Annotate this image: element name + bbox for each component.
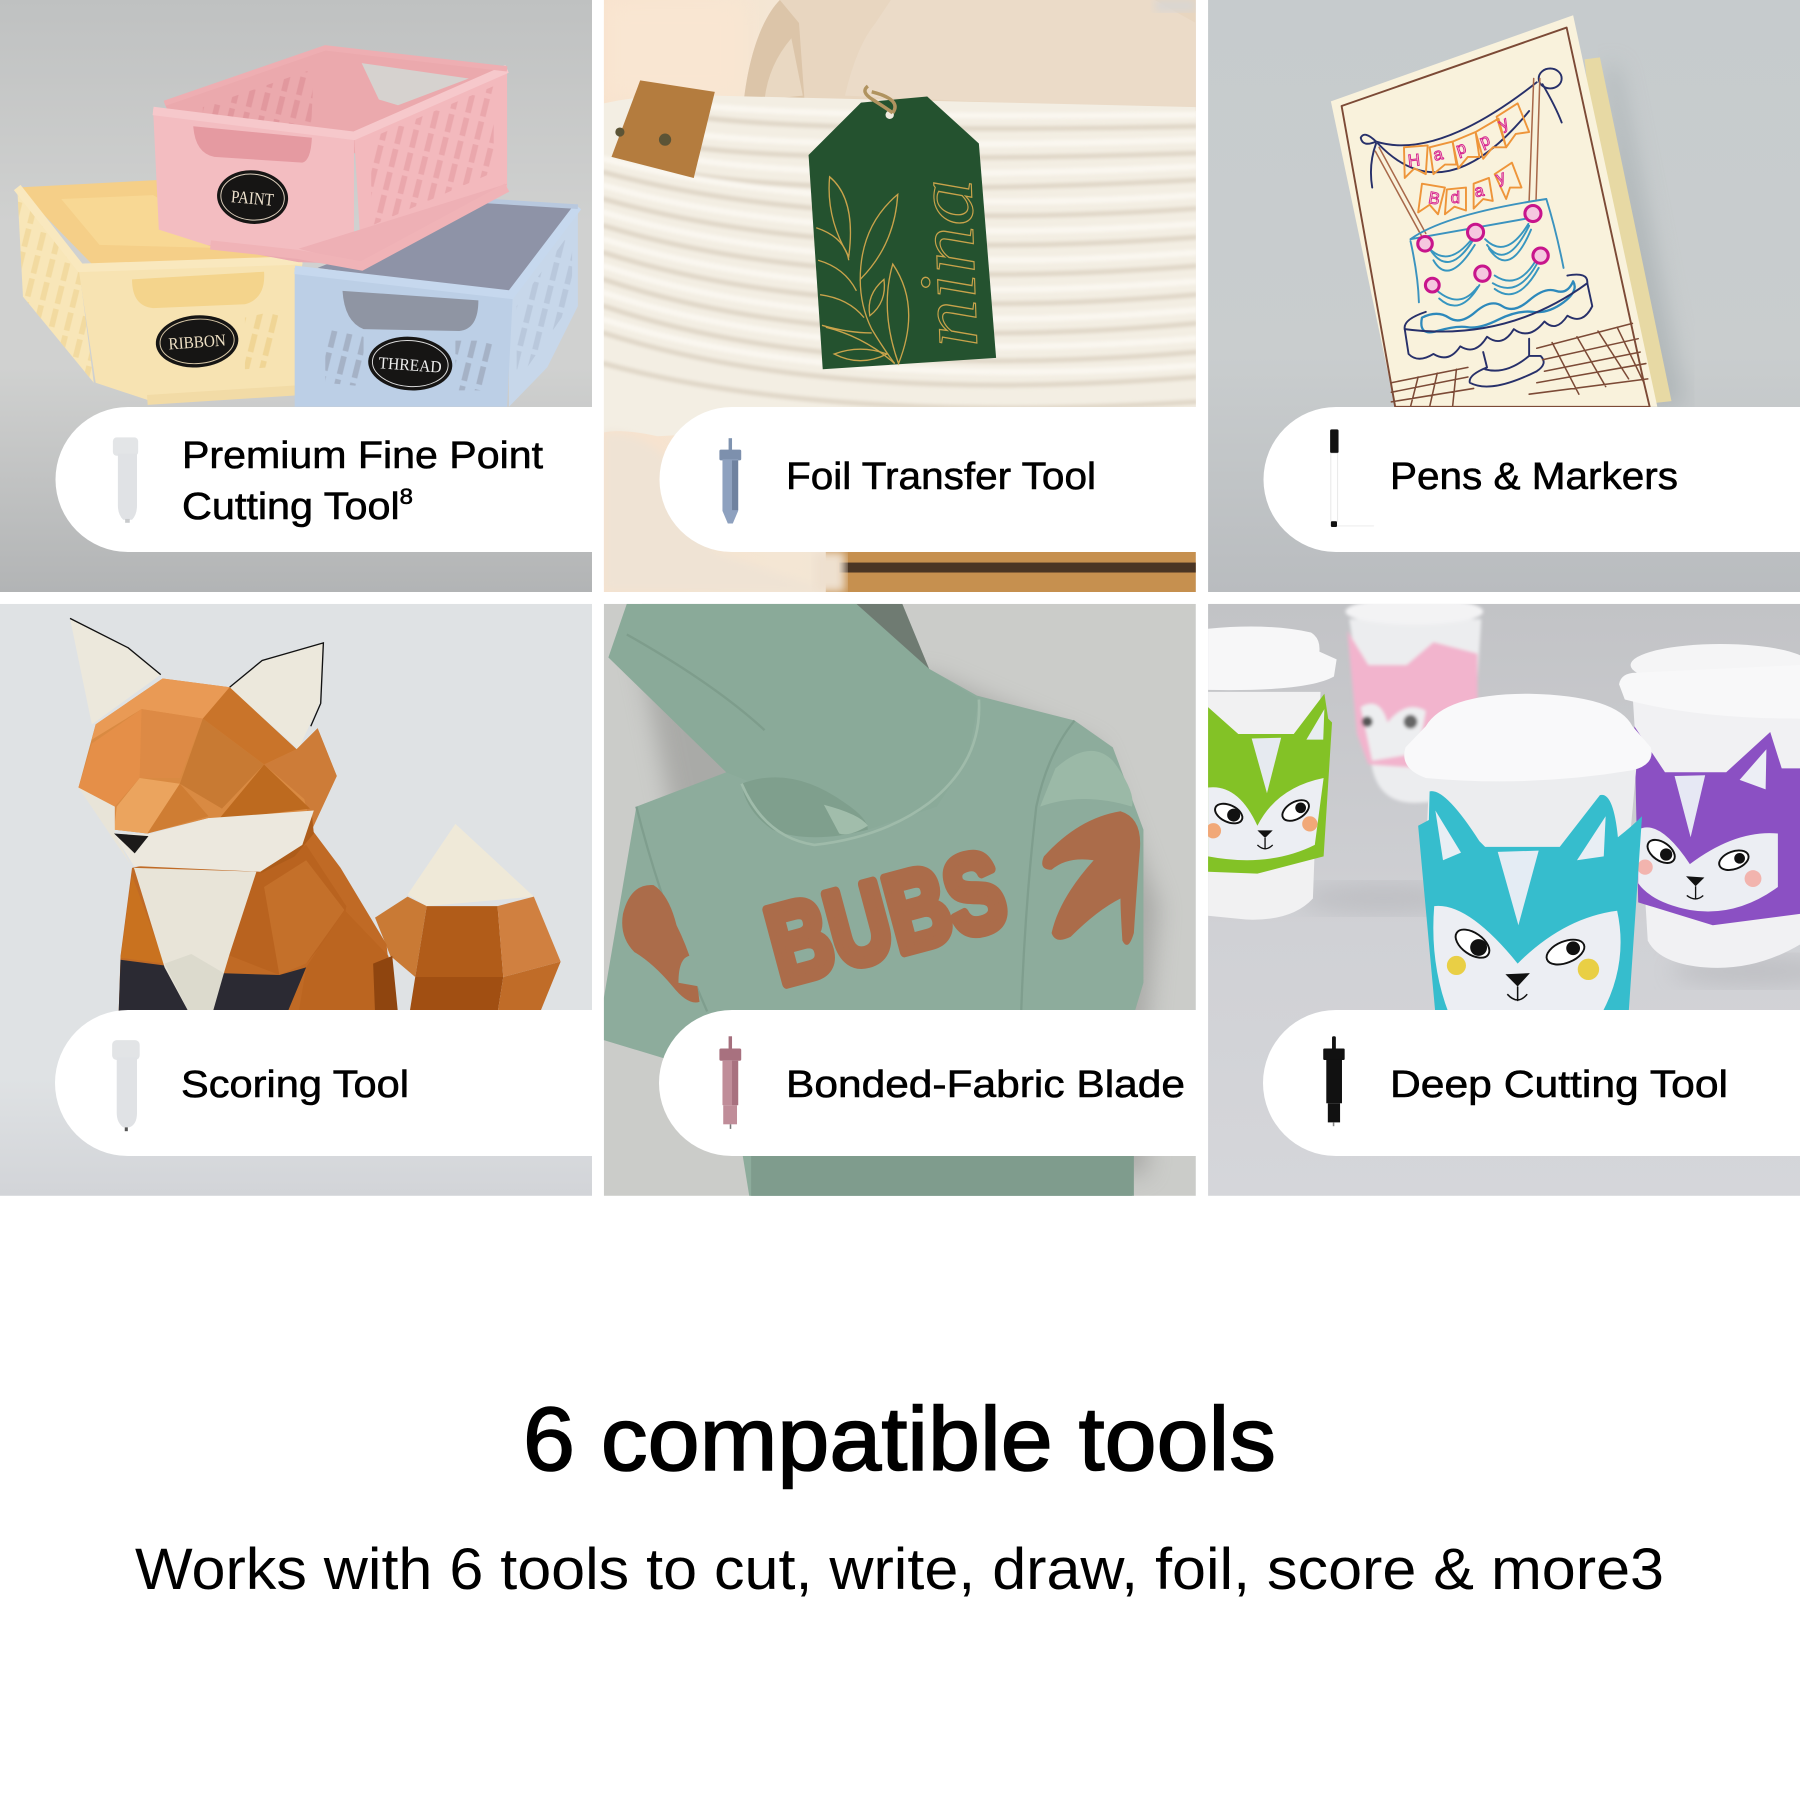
cup: pink (blurred) bbox=[1345, 598, 1483, 803]
cup: teal (front) bbox=[1404, 694, 1652, 1013]
hoodie body bbox=[604, 604, 1143, 1196]
fox head bbox=[78, 678, 337, 874]
label text: Pens & Markers bbox=[1390, 456, 1678, 498]
banner lettering: d bbox=[1451, 188, 1460, 207]
label: PAINT bbox=[217, 170, 288, 224]
banner strings bbox=[1376, 82, 1537, 172]
cup: green bbox=[1206, 627, 1337, 920]
fox tail bbox=[375, 824, 561, 1013]
label: PAINT: PAINT bbox=[230, 186, 275, 210]
panel: scoring tool bbox=[0, 604, 592, 1196]
label: RIBBON: RIBBON bbox=[168, 331, 226, 353]
crate: blue thread bbox=[295, 201, 578, 407]
floor and wood shelf bbox=[610, 438, 647, 586]
fox nose bbox=[114, 833, 148, 853]
sleeve appliqué right bbox=[1042, 811, 1140, 945]
panel: premium fine point cutting tool bbox=[0, 0, 592, 592]
panel: bonded-fabric blade bbox=[604, 604, 1196, 1196]
sleeve appliqué left bbox=[622, 885, 700, 1002]
label: THREAD bbox=[368, 336, 452, 390]
title: 6 compatible tools bbox=[523, 1390, 1276, 1490]
banner lettering bbox=[1408, 118, 1508, 204]
banner lettering: y bbox=[1495, 113, 1512, 134]
label text line 2: 8 bbox=[400, 484, 413, 509]
photo: green hoodie with heat-press letters bbox=[604, 604, 1196, 1196]
label: THREAD: THREAD bbox=[378, 353, 442, 377]
hem bbox=[751, 1156, 1134, 1196]
label text: Deep Cutting Tool bbox=[1390, 1064, 1728, 1106]
label pill bbox=[1263, 1010, 1800, 1156]
banner lettering: H bbox=[1407, 150, 1421, 170]
pennants bbox=[1404, 103, 1529, 214]
panel: pens and markers bbox=[1208, 0, 1800, 592]
photo: paper fox bbox=[0, 604, 592, 1196]
label pill bbox=[1264, 407, 1800, 552]
photo: cups with foam fox sleeves bbox=[1206, 598, 1800, 1196]
label text: Premium Fine Point bbox=[182, 435, 543, 477]
icon: fine point housing bbox=[113, 437, 138, 523]
label text: Scoring Tool bbox=[181, 1064, 409, 1106]
photo: rope basket with gift tag bbox=[604, 0, 1196, 592]
heat-press lettering: BUBS bbox=[755, 827, 1018, 1009]
cake bbox=[1410, 199, 1564, 302]
label: RIBBON bbox=[156, 315, 238, 368]
banner lettering: p bbox=[1477, 130, 1493, 151]
collar seam bbox=[742, 700, 979, 845]
teal foam sleeve bbox=[1418, 791, 1642, 1013]
floor tiles bbox=[1391, 323, 1648, 407]
banner lettering: y bbox=[1493, 167, 1508, 187]
gift tag bbox=[809, 86, 996, 369]
blanket bbox=[780, 0, 1196, 107]
banner lettering: B bbox=[1427, 188, 1441, 209]
panel: deep cutting tool bbox=[1206, 598, 1800, 1196]
icon: marker pen bbox=[1330, 429, 1374, 527]
banner lettering: a bbox=[1473, 181, 1486, 201]
leather strap bbox=[611, 80, 715, 178]
gold foil name: nina bbox=[900, 177, 995, 349]
label text: Foil Transfer Tool bbox=[786, 456, 1096, 498]
hood opening bbox=[742, 777, 868, 837]
icon: bonded-fabric blade bbox=[719, 1036, 741, 1129]
label pill bbox=[659, 1010, 1196, 1156]
banner lettering: p bbox=[1454, 138, 1468, 159]
icon: scoring housing bbox=[112, 1040, 140, 1131]
flowers bbox=[1418, 206, 1548, 292]
crate: pink paint bbox=[153, 48, 507, 266]
icon: foil transfer tip bbox=[719, 438, 741, 524]
photo: hand-drawn birthday card bbox=[1208, 0, 1800, 592]
label pill bbox=[660, 407, 1196, 552]
cake stand bbox=[1405, 275, 1592, 359]
label text line 2: Cutting Tool bbox=[182, 486, 382, 528]
fox body bbox=[119, 830, 398, 1013]
basket bbox=[604, 95, 1196, 436]
banner lettering: a bbox=[1431, 144, 1445, 165]
cake poles bbox=[1375, 78, 1540, 235]
gold foil leaves bbox=[816, 177, 909, 364]
panel: foil transfer tool bbox=[604, 0, 1196, 592]
label text: Bonded-Fabric Blade bbox=[786, 1064, 1185, 1106]
label pill bbox=[56, 407, 592, 552]
label pill bbox=[55, 1010, 592, 1156]
icon: deep cutting blade bbox=[1323, 1036, 1345, 1126]
crate: yellow ribbon bbox=[17, 180, 302, 400]
cup: purple bbox=[1619, 644, 1800, 968]
subtitle: Works with 6 tools to cut, write, draw, foil, score & more3 bbox=[135, 1537, 1664, 1602]
photo: stacked storage crates bbox=[0, 0, 592, 592]
